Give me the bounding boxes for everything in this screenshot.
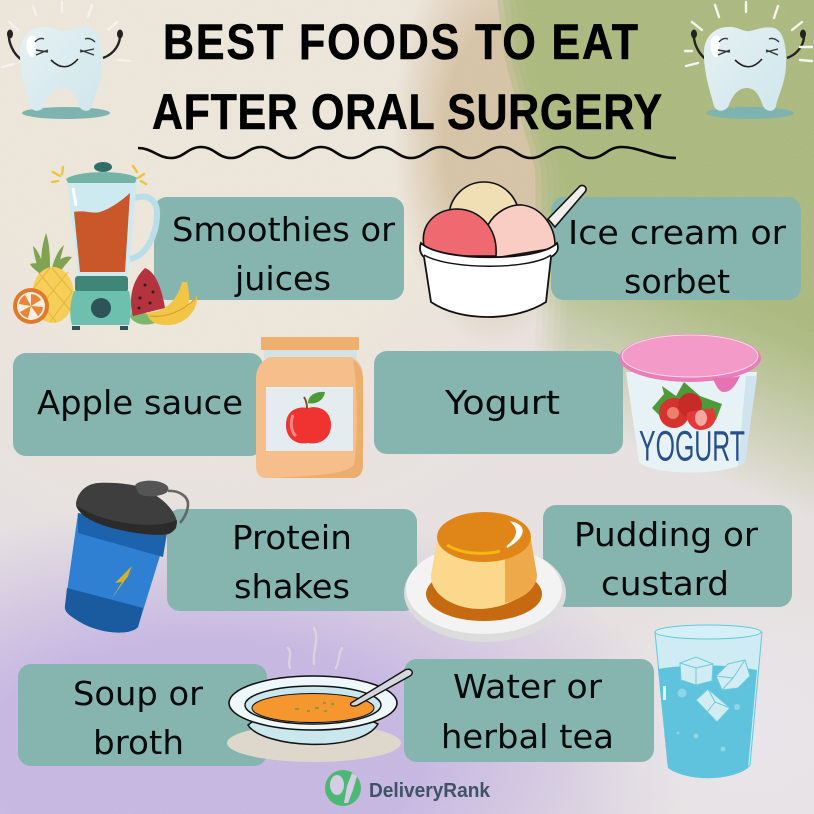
icon: pudding on plate — [404, 512, 566, 642]
panel: soup or broth: broth — [93, 723, 184, 762]
icon: soup bowl — [227, 628, 412, 762]
icon: glass of ice water — [655, 625, 762, 778]
panel: water or herbal tea: Water or — [453, 667, 602, 706]
panel: smoothies or juices: Smoothies or — [172, 210, 395, 249]
title: BEST FOODS TO EAT — [163, 14, 638, 70]
panel: ice cream or sorbet — [551, 197, 801, 301]
panel: yogurt — [374, 351, 623, 454]
icon: yogurt cup — [619, 334, 761, 472]
icon: ice cream bowl — [420, 182, 586, 317]
panel: ice cream or sorbet: Ice cream or — [568, 213, 786, 252]
panel: apple sauce: Apple sauce — [37, 383, 243, 422]
panel: ice cream or sorbet: sorbet — [624, 262, 730, 301]
icon: happy tooth right — [685, 2, 812, 119]
panel: yogurt: Yogurt — [444, 383, 560, 422]
icon: protein shaker — [65, 481, 188, 633]
logo: DeliveryRank — [325, 770, 491, 806]
panel: pudding or custard: Pudding or — [574, 515, 758, 554]
panel: smoothies or juices — [154, 197, 404, 300]
panel: pudding or custard — [543, 505, 792, 607]
panel: soup or broth — [18, 664, 267, 766]
panel: soup or broth: Soup or — [73, 674, 203, 713]
panel: apple sauce — [13, 353, 263, 456]
icon: happy tooth left — [2, 2, 130, 119]
icon: blender with fruit — [13, 162, 197, 330]
panel: protein shakes: Protein — [232, 518, 352, 557]
panel: water or herbal tea: herbal tea — [441, 717, 614, 756]
panel: smoothies or juices: juices — [234, 259, 331, 298]
logo: DeliveryRank: DeliveryRank — [369, 780, 491, 802]
icon: yogurt cup: YOGURT — [639, 422, 745, 470]
panel: pudding or custard: custard — [601, 564, 729, 603]
panel: water or herbal tea — [404, 659, 654, 762]
title — [152, 14, 662, 140]
icon: apple sauce jar — [256, 337, 363, 478]
panel: protein shakes: shakes — [234, 567, 350, 606]
panel: protein shakes — [167, 509, 417, 611]
wavy underline — [138, 147, 676, 158]
title: AFTER ORAL SURGERY — [152, 84, 662, 140]
